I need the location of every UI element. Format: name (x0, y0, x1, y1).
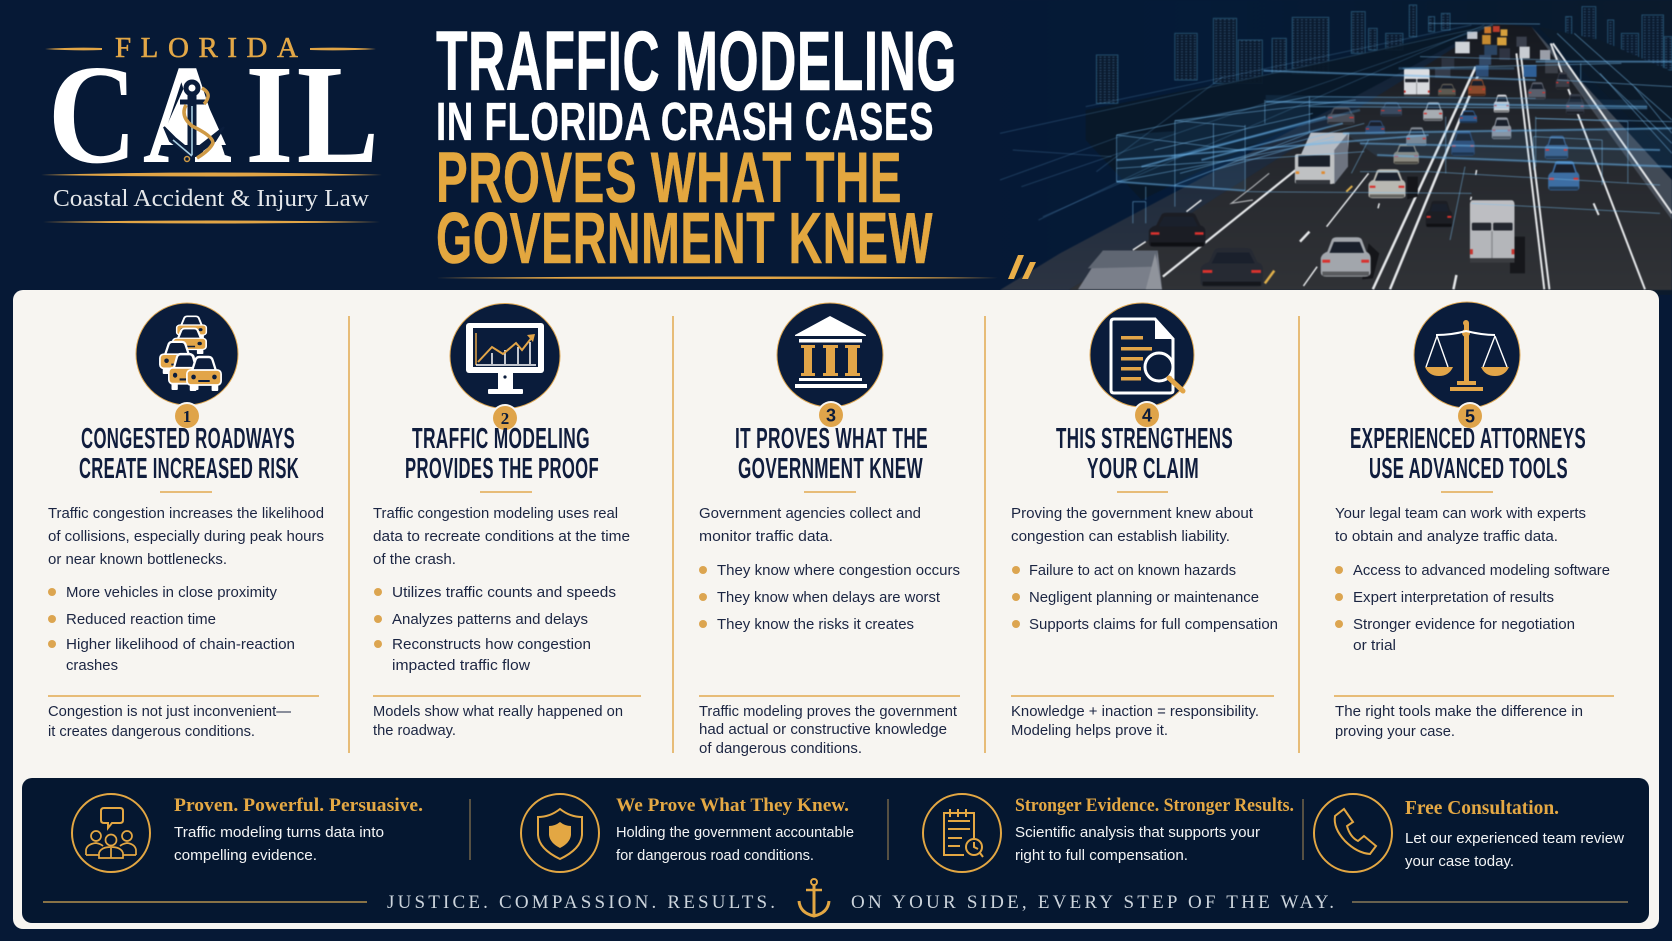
takeaway: The right tools make the difference in (1335, 703, 1583, 720)
tagline right: ON YOUR SIDE, EVERY STEP OF THE WAY. (851, 892, 1334, 913)
icon: phone (1314, 794, 1392, 872)
text block: stronger evidence: Stronger Evidence. Stronger Results. (1015, 795, 1294, 816)
heading (1350, 423, 1586, 485)
panel: bottom navy bar (22, 778, 1649, 923)
number badge 1: 1 (183, 407, 191, 426)
heading: GOVERNMENT KNEW (738, 453, 923, 485)
panel: column 3 government knew (699, 303, 960, 757)
intro text: of collisions, especially during peak hours (48, 528, 324, 545)
logo: Florida CAIL (41, 32, 383, 224)
text block: proven: compelling evidence. (174, 847, 317, 864)
bullet list: Access to advanced modeling software (1353, 562, 1610, 579)
bullet list: Reduced reaction time (66, 611, 216, 628)
text block: we prove: Holding the government accountable (616, 824, 854, 841)
text block: we prove: We Prove What They Knew. (616, 795, 849, 816)
intro text: to obtain and analyze traffic data. (1335, 528, 1558, 545)
lane markings (1133, 43, 1672, 289)
intro text: data to recreate conditions at the time (373, 528, 630, 545)
heading rule (480, 491, 532, 493)
takeaway (699, 703, 958, 757)
traffic vehicles (1078, 69, 1584, 289)
intro text: Traffic congestion modeling uses real (373, 505, 618, 522)
text block: stronger evidence: Scientific analysis that supports your (1015, 824, 1260, 841)
takeaway: the roadway. (373, 722, 456, 739)
bullet list: Failure to act on known hazards (1029, 562, 1236, 579)
title: IN FLORIDA CRASH CASES (436, 92, 934, 152)
icon: shield (521, 794, 599, 872)
takeaway: Traffic modeling proves the government (699, 703, 958, 720)
model wire lines (1117, 23, 1672, 240)
takeaway: Models show what really happened on (373, 703, 623, 720)
footer rule (373, 695, 641, 697)
bullet list (1335, 562, 1610, 654)
takeaway: Knowledge + inaction = responsibility. (1011, 703, 1259, 720)
takeaway: of dangerous conditions. (699, 740, 862, 757)
heading: IT PROVES WHAT THE (735, 423, 928, 455)
city skyline (1096, 5, 1672, 103)
heading (79, 423, 299, 485)
intro text: congestion can establish liability. (1011, 528, 1230, 545)
footer rule (48, 695, 319, 697)
grey box truck bottom (1078, 251, 1162, 289)
intro text: Government agencies collect and (699, 505, 921, 522)
heading: YOUR CLAIM (1087, 453, 1199, 485)
number badge 2 (491, 404, 519, 432)
intro text (373, 505, 630, 568)
intro text (1335, 505, 1586, 545)
intro text (699, 505, 921, 545)
heading rule (1117, 491, 1168, 493)
takeaway (373, 703, 623, 739)
model faint perspective lines (1000, 25, 1493, 220)
takeaway (48, 703, 291, 740)
intro text: of the crash. (373, 551, 456, 568)
heading rule (1441, 491, 1493, 493)
panel: column 1 congested roadways (48, 303, 324, 740)
box truck (1295, 133, 1349, 184)
bar dividers (470, 799, 1303, 860)
title accent slashes (1008, 255, 1036, 279)
logo top rules (45, 48, 376, 50)
bullet list: Higher likelihood of chain-reaction (66, 636, 295, 653)
takeaway: Congestion is not just inconvenient— (48, 703, 291, 720)
number badge 5: 5 (1465, 406, 1475, 426)
icon: people with speech bubble (72, 794, 150, 872)
low blocks (1086, 25, 1493, 200)
bullet list: Stronger evidence for negotiation (1353, 616, 1575, 633)
logo anchor (158, 70, 226, 162)
tagline left: JUSTICE. COMPASSION. RESULTS. (387, 892, 775, 913)
icon: document with magnifier (1090, 303, 1194, 407)
text block: free consultation (1405, 797, 1624, 870)
right shoulder (1531, 27, 1672, 220)
bullet list: crashes (66, 657, 118, 674)
text block: stronger evidence (1015, 795, 1294, 864)
bullet list (48, 584, 295, 674)
title: TRAFFIC MODELING (436, 14, 957, 108)
main white panel (13, 290, 1659, 929)
panel: column 2 traffic modeling (373, 304, 641, 739)
panel: column 4 strengthens claim (1011, 303, 1278, 739)
title (436, 14, 957, 279)
intro text: or near known bottlenecks. (48, 551, 227, 568)
icon: clipboard checklist (923, 794, 1001, 872)
takeaway (1335, 703, 1583, 740)
bullet list: Negligent planning or maintenance (1029, 589, 1259, 606)
bullet list: Reconstructs how congestion (392, 636, 591, 653)
number badge 3 (817, 401, 845, 429)
takeaway: proving your case. (1335, 723, 1455, 740)
heading rule (804, 491, 856, 493)
title underline (436, 276, 998, 279)
title: GOVERNMENT KNEW (436, 199, 933, 279)
heading: THIS STRENGTHENS (1056, 423, 1233, 455)
heading (735, 423, 928, 485)
bullet list: Supports claims for full compensation (1029, 616, 1278, 633)
bullet list: Analyzes patterns and delays (392, 611, 588, 628)
intro text: Your legal team can work with experts (1335, 505, 1586, 522)
logo swoosh upper (41, 172, 383, 176)
text block: proven (174, 795, 423, 864)
bullet list: They know when delays are worst (717, 589, 941, 606)
heading: TRAFFIC MODELING (412, 423, 590, 455)
logo CAIL text: CAIL (48, 35, 379, 193)
number badge 4: 4 (1142, 406, 1152, 426)
number badge 5 (1456, 402, 1484, 430)
footer rule (1011, 695, 1274, 697)
icon: congested cars (136, 303, 238, 405)
far traffic (1435, 26, 1558, 78)
road surface (1069, 23, 1672, 290)
bullet list: Utilizes traffic counts and speeds (392, 584, 616, 601)
heading (1056, 423, 1233, 485)
heading rule (160, 491, 212, 493)
text block: we prove (616, 795, 854, 864)
heading: CONGESTED ROADWAYS (81, 423, 295, 455)
logo tagline: Coastal Accident & Injury Law (53, 186, 370, 212)
number badge 4 (1133, 401, 1161, 429)
title: PROVES WHAT THE (436, 139, 902, 218)
text block: proven: Proven. Powerful. Persuasive. (174, 795, 423, 816)
bullet list: They know the risks it creates (717, 616, 914, 633)
number badge 2: 2 (501, 409, 509, 428)
icon: monitor with chart (450, 304, 560, 408)
column dividers (349, 316, 1299, 753)
panel: column 5 experienced attorneys (1334, 302, 1614, 740)
intro text (1011, 505, 1254, 545)
left shoulder (1000, 23, 1493, 290)
model highlight bands (1117, 95, 1672, 191)
text block: stronger evidence: right to full compensation. (1015, 847, 1188, 864)
text block: free consultation: Let our experienced team review (1405, 830, 1624, 847)
model glow lines (1117, 62, 1672, 191)
bullet list (699, 562, 960, 633)
number badge 1 (173, 402, 201, 430)
icon: government building (777, 303, 883, 407)
bullet list: More vehicles in close proximity (66, 584, 277, 601)
bullet list: or trial (1353, 637, 1396, 654)
bullet list: Expert interpretation of results (1353, 589, 1554, 606)
tagline rule right (1352, 901, 1628, 903)
bullet list (374, 584, 616, 674)
takeaway: it creates dangerous conditions. (48, 723, 255, 740)
takeaway: Modeling helps prove it. (1011, 722, 1168, 739)
intro text: Proving the government knew about (1011, 505, 1254, 522)
bullet list (1012, 562, 1278, 633)
icon: anchor (799, 879, 829, 916)
number badge 3: 3 (826, 406, 836, 426)
logo FLORIDA text: FLORIDA (115, 32, 298, 64)
logo swoosh lower (43, 220, 380, 224)
bullet list: impacted traffic flow (392, 657, 530, 674)
text block: proven: Traffic modeling turns data into (174, 824, 384, 841)
header photo: highway with digital traffic model overlay (950, 0, 1672, 295)
intro text: Traffic congestion increases the likelihood (48, 505, 324, 522)
tagline rule left (43, 901, 367, 903)
text block: free consultation: your case today. (1405, 853, 1514, 870)
heading: PROVIDES THE PROOF (405, 453, 599, 485)
icon: scales of justice (1414, 302, 1520, 408)
takeaway: had actual or constructive knowledge (699, 721, 947, 738)
takeaway (1011, 703, 1259, 739)
footer rule (1334, 695, 1614, 697)
bullet list: They know where congestion occurs (717, 562, 960, 579)
heading: CREATE INCREASED RISK (79, 453, 299, 485)
intro text (48, 505, 324, 568)
intro text: monitor traffic data. (699, 528, 833, 545)
text block: we prove: for dangerous road conditions. (616, 847, 814, 864)
heading (405, 423, 599, 485)
text block: free consultation: Free Consultation. (1405, 797, 1559, 819)
footer rule (699, 695, 960, 697)
